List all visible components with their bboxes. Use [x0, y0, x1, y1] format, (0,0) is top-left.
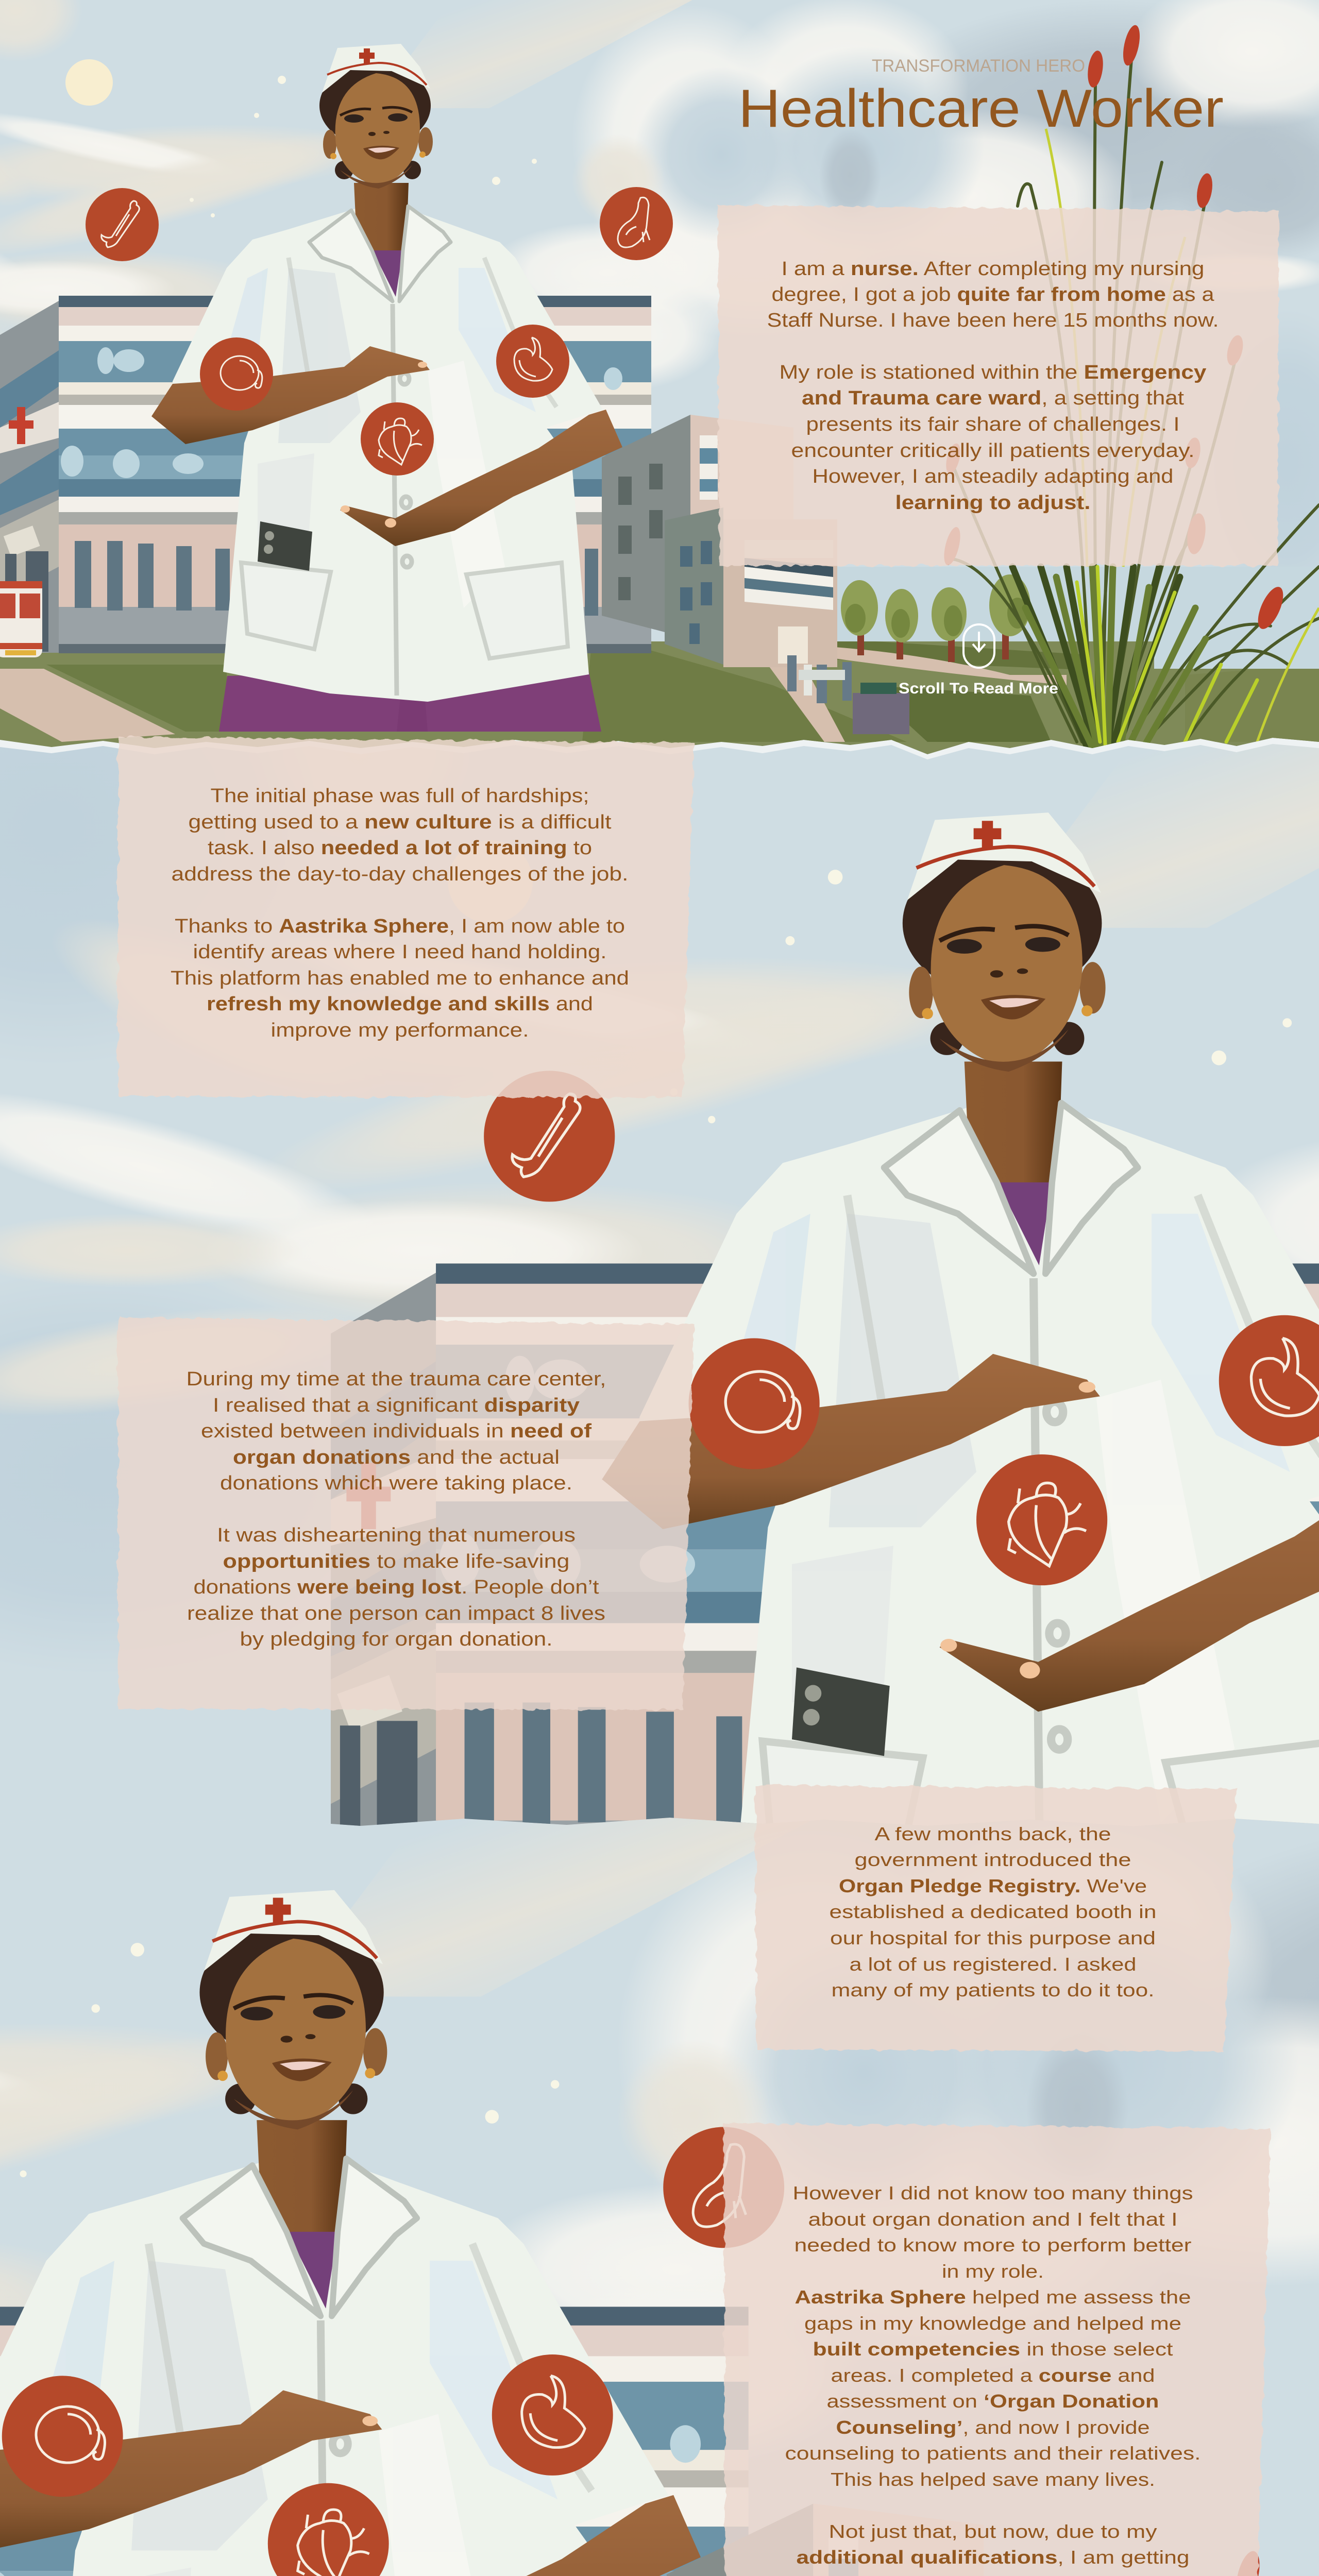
- panel: I am a nurse: [718, 205, 1279, 566]
- hero illustration: nurse, hospital, plants: [0, 0, 1319, 754]
- text block: trauma care center: opportunities to make life-saving: [223, 1551, 570, 1572]
- mouth: [363, 146, 399, 159]
- text block: competencies: gaps in my knowledge and helped me: [804, 2313, 1181, 2334]
- text block: registry: Organ Pledge Registry. We've: [839, 1875, 1147, 1896]
- text block: registry: government introduced the: [854, 1849, 1131, 1870]
- stars: [190, 76, 537, 217]
- text block: registry: our hospital for this purpose and: [830, 1927, 1156, 1948]
- text block: hardships and Aastrika Sphere: identify areas where I need hand holding.: [193, 941, 607, 963]
- text block: competencies: Counseling’ , and now I provide: [836, 2417, 1150, 2438]
- text block: hardships and Aastrika Sphere: refresh my knowledge and skills and: [207, 993, 593, 1015]
- text block: competencies: built competencies in those select: [813, 2338, 1173, 2360]
- coat front seam and buttons: [289, 258, 556, 696]
- text block: competencies: assessment on ‘Organ Donation: [826, 2391, 1159, 2412]
- text block: intro: Staff Nurse. I have been here 15 months now.: [767, 310, 1219, 331]
- main title: Healthcare Worker: [738, 79, 1224, 139]
- text block: trauma care center: donations which were taking place.: [220, 1472, 572, 1494]
- text block: competencies: counseling to patients and their relatives.: [785, 2443, 1200, 2464]
- people with stretcher and bench: [787, 655, 909, 734]
- section 3 illustration: nurse with hospital, zoomed scene: [0, 1819, 1319, 2576]
- text block: competencies: additional qualifications , I am getting: [797, 2547, 1189, 2568]
- text block: registry: [830, 1823, 1156, 2001]
- panel: additional qualifications: [723, 2123, 1271, 2576]
- text block: trauma care center: During my time at the trauma care center,: [187, 1368, 606, 1390]
- hair: [319, 64, 431, 179]
- nurse cap: [322, 44, 430, 93]
- text block: hardships and Aastrika Sphere: This platform has enabled me to enhance and: [171, 968, 629, 989]
- text block: hardships and Aastrika Sphere: The initial phase was full of hardships;: [210, 785, 589, 807]
- panel: organ pledge registry: [755, 1785, 1237, 2052]
- panel: disparity in organ donation: [118, 1317, 694, 1710]
- text block: registry: established a dedicated booth in: [830, 1901, 1156, 1922]
- text block: competencies: Not just that, but now, due to my: [828, 2521, 1157, 2542]
- text block: hardships and Aastrika Sphere: [171, 785, 629, 1041]
- text block: trauma care center: [187, 1368, 606, 1650]
- footpaths: [0, 647, 1067, 742]
- trees: [841, 574, 1030, 662]
- nose: [368, 131, 390, 136]
- text block: hardships and Aastrika Sphere: improve my performance.: [271, 1020, 529, 1041]
- text block: trauma care center: by pledging for organ donation.: [240, 1629, 552, 1650]
- nurse and organ icons: [86, 44, 673, 732]
- page title block: [738, 56, 1224, 139]
- text block: registry: A few months back, the: [875, 1823, 1111, 1844]
- sky streaks: [0, 83, 1319, 393]
- purple blouse: [373, 250, 403, 297]
- text block: intro: However, I am steadily adapting and: [812, 466, 1174, 487]
- text block: hardships and Aastrika Sphere: task. I also needed a lot of training to: [208, 837, 592, 859]
- sky: [0, 0, 1319, 871]
- text block: intro: and Trauma care ward , a setting that: [802, 387, 1184, 409]
- section 2 illustration: nurse close-up over hospital: [0, 746, 1319, 1826]
- text block: trauma care center: organ donations and the actual: [233, 1447, 560, 1468]
- eyes: [344, 113, 408, 123]
- face: [335, 73, 420, 189]
- ground: [0, 634, 1319, 871]
- painted layer: [0, 24, 1319, 871]
- icon: scroll capsule with arrow: [963, 624, 994, 668]
- torn paper edge under hero: [0, 732, 1319, 759]
- text block: trauma care center: I realised that a significant disparity: [213, 1395, 580, 1416]
- text block: competencies: However I did not know too many things: [792, 2182, 1193, 2204]
- phone: [258, 521, 312, 571]
- far horizon sky: [824, 567, 1319, 669]
- organ icon: bone: [86, 188, 159, 261]
- neck: [354, 183, 409, 251]
- cattail plants: [941, 24, 1319, 747]
- eyebrow label: TRANSFORMATION HERO: [872, 56, 1085, 76]
- pockets: [241, 563, 568, 658]
- text block: intro: degree, I got a job quite far from home as a: [772, 284, 1214, 306]
- sun: [65, 59, 113, 106]
- text block: hardships and Aastrika Sphere: Thanks to Aastrika Sphere , I am now able to: [175, 916, 625, 937]
- diagonal cream band: [371, 0, 721, 108]
- coat: [170, 209, 603, 702]
- text block: trauma care center: It was disheartening that numerous: [217, 1524, 576, 1546]
- text block: competencies: areas. I completed a course and: [831, 2365, 1155, 2386]
- text block: competencies: Aastrika Sphere helped me assess the: [794, 2286, 1191, 2308]
- organ icon: stomach: [496, 325, 569, 398]
- text block: trauma care center: realize that one person can impact 8 lives: [187, 1603, 605, 1624]
- text block: competencies: This has helped save many lives.: [831, 2469, 1155, 2490]
- text block: intro: My role is stationed within the Emergency: [779, 362, 1207, 383]
- organ icon: liver: [600, 187, 673, 260]
- plant clump: [1012, 567, 1257, 747]
- gray wing buildings: [602, 415, 837, 667]
- text block: intro: [767, 258, 1219, 514]
- lower forearm: [340, 410, 622, 546]
- hospital main building: [59, 296, 651, 653]
- text block: trauma care center: existed between individuals in need of: [201, 1420, 591, 1442]
- text block: competencies: needed to know more to perform better: [794, 2234, 1192, 2256]
- text block: registry: a lot of us registered. I asked: [849, 1954, 1137, 1975]
- collar and lapels: [309, 206, 451, 301]
- eyebrows: [340, 107, 412, 115]
- panel: initial phase: [118, 737, 694, 1097]
- scroll label: Scroll To Read More: [899, 680, 1058, 697]
- text block: intro: learning to adjust.: [895, 492, 1090, 514]
- ears and earrings: [323, 127, 433, 159]
- scroll prompt: [899, 624, 1058, 697]
- text block: intro: presents its fair share of challenges. I: [806, 414, 1180, 435]
- text block: hardships and Aastrika Sphere: address the day-to-day challenges of the job.: [171, 863, 629, 885]
- text block: intro: encounter critically ill patients everyday.: [791, 440, 1194, 462]
- text block: competencies: in my role.: [942, 2261, 1044, 2282]
- upper forearm: [151, 346, 430, 444]
- skirt: [219, 665, 601, 732]
- organ icon: heart: [361, 402, 434, 476]
- text block: competencies: [785, 2182, 1200, 2576]
- hospital side wing with red cross: [0, 301, 59, 653]
- text block: hardships and Aastrika Sphere: getting used to a new culture is a difficult: [189, 811, 612, 833]
- text block: intro: I am a nurse. After completing my nursing: [781, 258, 1205, 280]
- organ icon: eye: [200, 337, 273, 411]
- text block: registry: many of my patients to do it too.: [832, 1979, 1154, 2001]
- text block: competencies: about organ donation and I felt that I: [808, 2209, 1178, 2230]
- text block: trauma care center: donations were being lost . People don’t: [194, 1577, 599, 1598]
- ambulance: [0, 581, 42, 657]
- clouds: [484, 0, 1134, 392]
